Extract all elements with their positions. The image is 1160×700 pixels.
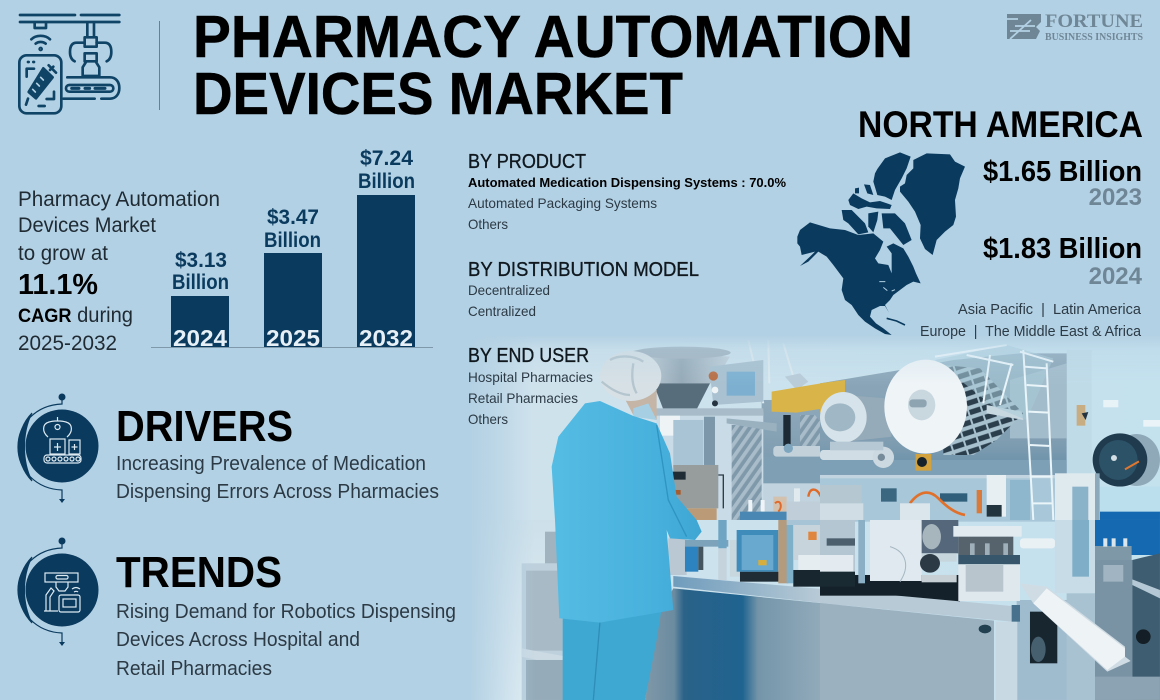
- header icon: automated syringe and vial line: [19, 15, 119, 113]
- logo: Fortune Business Insights: BUSINESS INSIGHTS: [1045, 32, 1143, 43]
- segment: by product: [468, 151, 786, 232]
- trends text: TRENDS: [116, 548, 282, 597]
- drivers text: Dispensing Errors Across Pharmacies: [116, 481, 439, 503]
- bar 2025: [264, 206, 322, 351]
- segment: by end user: Others: [468, 411, 508, 427]
- segment: by product: Automated Packaging Systems: [468, 195, 657, 211]
- bar 2032: Billion: [358, 170, 415, 193]
- icon: trends badge: [18, 538, 98, 646]
- icon: drivers badge: [18, 394, 98, 503]
- logo mark: [1007, 14, 1041, 39]
- segment: by product: Others: [468, 216, 508, 232]
- CAGR statement: 2025-2032: [18, 332, 117, 355]
- regional values: Europe | The Middle East & Africa: [920, 323, 1142, 340]
- regional values: 2023: [1089, 184, 1142, 211]
- regional values: $1.83 Billion: [983, 233, 1142, 265]
- segment: by product: BY PRODUCT: [468, 151, 586, 173]
- header divider: [159, 21, 160, 110]
- bar 2024: 2024: [173, 325, 227, 351]
- regional values: $1.65 Billion: [983, 156, 1142, 188]
- bar 2025: $3.47: [267, 206, 319, 229]
- trends text: Devices Across Hospital and: [116, 629, 360, 651]
- segment: by end user: BY END USER: [468, 345, 589, 367]
- logo: Fortune Business Insights: FORTUNE: [1045, 11, 1143, 32]
- trends text: Retail Pharmacies: [116, 658, 272, 680]
- CAGR statement: [18, 188, 220, 355]
- bar 2025: 2025: [266, 325, 320, 351]
- bar 2032: $7.24: [360, 147, 413, 170]
- trends text: [116, 548, 456, 680]
- bar 2025: Billion: [264, 229, 321, 252]
- CAGR statement: to grow at: [18, 242, 108, 265]
- title: PHARMACY AUTOMATION: [193, 3, 913, 70]
- segment: by distribution model: BY DISTRIBUTION MODEL: [468, 259, 699, 281]
- segment: by end user: Retail Pharmacies: [468, 390, 578, 406]
- logo: Fortune Business Insights: [1007, 11, 1143, 43]
- lower right machine: [820, 520, 1160, 700]
- trends text: Rising Demand for Robotics Dispensing: [116, 601, 456, 623]
- segment: by distribution model: [468, 259, 699, 319]
- CAGR statement: 11.1%: [18, 269, 98, 301]
- CAGR statement: Pharmacy Automation: [18, 188, 220, 211]
- CAGR statement: Devices Market: [18, 214, 156, 237]
- regional values: [858, 104, 1143, 340]
- title: [193, 3, 913, 127]
- operator in blue uniform: [552, 351, 702, 700]
- drivers text: Increasing Prevalence of Medication: [116, 453, 426, 475]
- segment: by product: Automated Medication Dispensing Systems : 70.0%: [468, 175, 786, 190]
- bar chart: [151, 147, 433, 351]
- CAGR statement: CAGR during: [18, 304, 133, 327]
- bar 2032: 2032: [359, 325, 413, 351]
- photo: pharmacy packaging machine with operator: [460, 330, 1160, 700]
- drivers text: DRIVERS: [116, 402, 293, 451]
- bar 2024: Billion: [172, 271, 229, 294]
- regional values: 2024: [1089, 263, 1143, 290]
- drivers text: [116, 402, 439, 503]
- regional values: Asia Pacific | Latin America: [958, 301, 1142, 318]
- segment: by end user: [468, 345, 593, 427]
- title: DEVICES MARKET: [193, 60, 683, 127]
- bar 2024: $3.13: [175, 249, 227, 272]
- upper left machine: [633, 340, 845, 520]
- map: North America: [797, 152, 965, 335]
- segment: by distribution model: Centralized: [468, 303, 536, 319]
- lower left bench and counter: [522, 520, 842, 700]
- segment: by distribution model: Decentralized: [468, 282, 550, 298]
- segment: by end user: Hospital Pharmacies: [468, 369, 593, 385]
- bar 2024: [171, 249, 229, 351]
- upper right machine: [820, 345, 1160, 522]
- bar 2032: [357, 147, 415, 351]
